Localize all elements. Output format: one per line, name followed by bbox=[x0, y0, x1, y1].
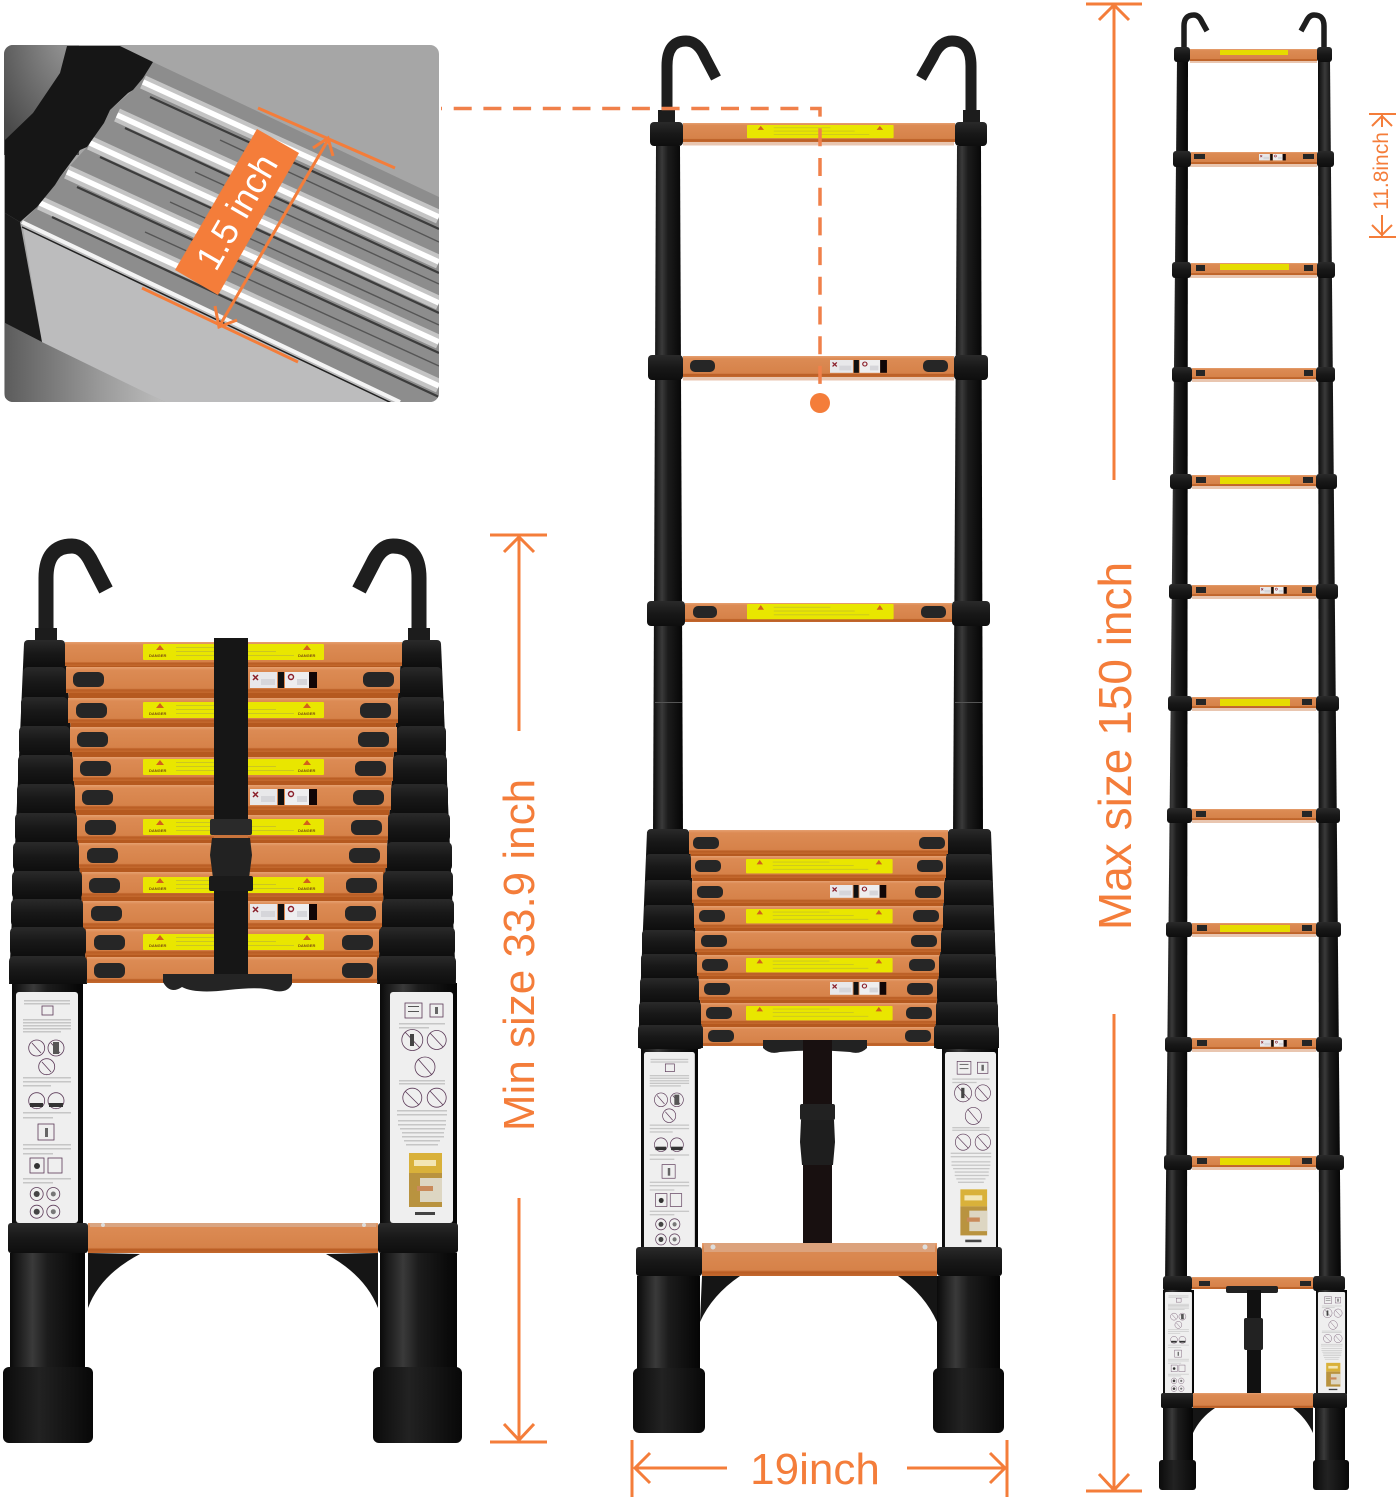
bottom rung, gussets, collars, feet bbox=[1159, 1393, 1349, 1490]
warning labels on rungs: DANGER bbox=[298, 768, 315, 773]
icon: left and right hooks bbox=[35, 546, 430, 642]
warning labels on rungs: DANGER bbox=[149, 768, 166, 773]
warning labels on rungs: DANGER bbox=[298, 653, 315, 658]
telescoping tubes bbox=[1165, 60, 1341, 1285]
warning labels on rungs: DANGER bbox=[149, 886, 166, 891]
dimension: max size 150 inch bbox=[1086, 4, 1142, 1491]
twelve extended rungs with collars bbox=[1163, 47, 1345, 1291]
strap with buckle and handle bbox=[763, 1040, 867, 1245]
strap with handle and buckle bbox=[1226, 1286, 1278, 1394]
ladder: fully extended bbox=[1159, 15, 1349, 1490]
callout: 1.5 inch tread width: 1.5 inch bbox=[187, 147, 286, 277]
callout: 1.5 inch tread width bbox=[142, 108, 395, 362]
folded rung stack with collars bbox=[9, 640, 456, 984]
icon: hooks bbox=[1184, 15, 1324, 48]
warning labels on rungs: DANGER bbox=[298, 886, 315, 891]
dimension: min size 33.9 inch bbox=[490, 535, 547, 1442]
warning labels on rungs: DANGER bbox=[149, 653, 166, 658]
warning stickers bbox=[1163, 1290, 1347, 1394]
bottom rung, gussets, collars, feet bbox=[3, 1223, 462, 1443]
dimension: 19 inch width bbox=[632, 1440, 1007, 1497]
warning labels on rungs: DANGER bbox=[298, 711, 315, 716]
folded rung stack bbox=[638, 829, 999, 1049]
dimension: min size 33.9 inch: Min size 33.9 inch bbox=[495, 779, 544, 1131]
lower tubes behind stickers bbox=[12, 983, 457, 1225]
lower tubes bbox=[641, 1040, 998, 1250]
warning labels on rungs: DANGER bbox=[149, 943, 166, 948]
warning labels on rungs bbox=[143, 644, 324, 950]
warning labels on rungs: DANGER bbox=[149, 711, 166, 716]
warning labels on rungs: DANGER bbox=[298, 828, 315, 833]
ladder: folded, minimum size bbox=[3, 546, 462, 1443]
warning stickers on tubes bbox=[16, 992, 453, 1223]
strap with buckle and handle bbox=[163, 638, 292, 991]
extended rungs bbox=[647, 122, 990, 626]
dimension: max size 150 inch: Max size 150 inch bbox=[1089, 562, 1141, 930]
bottom rung, gussets, collars, feet bbox=[633, 1243, 1004, 1433]
warning stickers bbox=[644, 1052, 996, 1249]
dimension: 11.8 inch rung spacing: 11.8inch bbox=[1370, 132, 1393, 210]
dashed leader from close-up to ladder rung bbox=[441, 108, 830, 413]
dimension: 11.8 inch rung spacing bbox=[1369, 114, 1396, 237]
panel: rung tread close-up bbox=[4, 45, 439, 407]
warning labels on rungs: DANGER bbox=[149, 828, 166, 833]
ladder: partly extended, front view bbox=[633, 41, 1004, 1433]
telescoping tubes bbox=[653, 146, 983, 835]
icon: hooks bbox=[658, 41, 980, 124]
warning labels on rungs: DANGER bbox=[298, 943, 315, 948]
dimension: 19 inch width: 19inch bbox=[750, 1445, 880, 1494]
